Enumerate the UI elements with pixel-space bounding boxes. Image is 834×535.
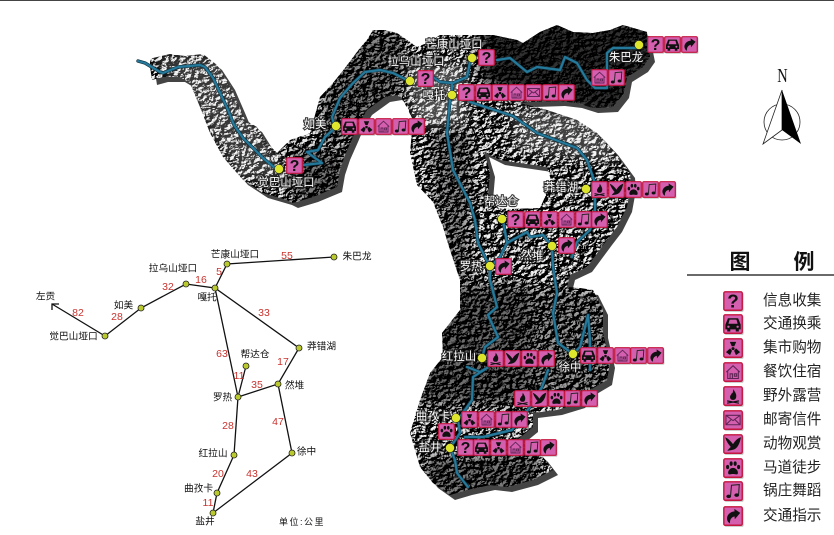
icon: wildlife [609, 182, 625, 199]
icon: transport [474, 440, 490, 457]
icon: info: ? [290, 158, 299, 175]
route distances: 35 [251, 379, 263, 391]
legend item: 信息收集 [724, 292, 822, 313]
legend item: 动物观赏 [724, 435, 821, 455]
icon: dance [525, 440, 541, 457]
icon: mail [526, 85, 542, 102]
icon: info: ? [462, 85, 471, 102]
route place names: 红拉山 [198, 446, 228, 460]
location: 朱巴龙: 朱巴龙 [609, 51, 643, 64]
icon: north arrow: N [777, 64, 788, 87]
icon: direction [496, 259, 512, 276]
legend item: 交通指示 [724, 506, 821, 527]
location: 曲孜卡 [416, 409, 528, 441]
location: 拉乌山垭口: 拉乌山垭口 [388, 54, 444, 68]
legend item: 邮寄信件 [724, 410, 821, 431]
icon: direction [409, 119, 425, 136]
legend item: 野外露营 [724, 387, 821, 407]
service row between 徐中 and 曲孜卡 [515, 391, 598, 408]
icon: direction [682, 37, 698, 54]
route place names: 帮达仓 [240, 348, 270, 360]
legend item: 锅庄舞蹈: 锅庄舞蹈 [763, 481, 821, 499]
icon: direction [559, 238, 575, 255]
route distances: 63 [216, 348, 228, 360]
terrain tonal shading [150, 20, 660, 500]
route place names: 拉乌山垭口 [149, 262, 197, 274]
icon: shopping [491, 440, 507, 457]
icon: shopping [359, 119, 375, 136]
icon: dance [543, 85, 559, 102]
icon: shopping [492, 85, 509, 102]
legend item: 动物观赏: 动物观赏 [763, 435, 821, 452]
legend item: 马道徒步 [724, 459, 821, 479]
river and road network [138, 48, 637, 487]
route place names: 如美 [114, 298, 133, 312]
route place names: 嘎托 [197, 290, 217, 304]
route place names: 曲孜卡 [184, 482, 213, 494]
location: 嘎托 [423, 85, 575, 102]
route distances: 55 [281, 250, 293, 262]
icon: horse trail [626, 182, 642, 199]
icon: direction [559, 85, 575, 102]
icon: transport [581, 348, 597, 365]
icon: shopping [598, 348, 614, 365]
location: 盐井: 盐井 [419, 440, 441, 454]
route distances: 43 [246, 468, 258, 480]
legend item: 交通换乘 [724, 314, 822, 335]
legend item: 集市购物 [724, 339, 821, 359]
route place names: 单位:公里 [279, 516, 325, 527]
location: 罗热 [460, 259, 512, 276]
location: 朱巴龙 [592, 37, 698, 87]
icon: info: ? [511, 212, 520, 229]
legend item: 邮寄信件: 邮寄信件 [763, 410, 821, 428]
legend item: 交通指示: 交通指示 [763, 506, 821, 524]
icon: direction [512, 412, 528, 429]
icon: lodging [559, 212, 575, 229]
icon: shopping [462, 412, 478, 429]
route place names: 芒康山垭口 [211, 248, 259, 260]
icon: dance [631, 348, 647, 365]
icon: wildlife [532, 391, 548, 408]
icon: direction [648, 348, 664, 365]
route distances [72, 250, 293, 509]
icon: info: ? [461, 440, 470, 457]
route distances: 16 [195, 274, 207, 286]
route place names: 左贡 [36, 290, 55, 302]
icon: dance [393, 119, 409, 136]
icon: dance [565, 391, 581, 408]
icon: dance [643, 182, 659, 199]
icon: direction [660, 182, 676, 199]
location: 徐中: 徐中 [559, 360, 581, 374]
route place names [36, 248, 372, 528]
icon: shopping [542, 212, 558, 229]
icon: lodging [615, 348, 631, 365]
icon: camping [515, 391, 531, 408]
location: 徐中 [559, 348, 664, 374]
icon: wildlife [505, 351, 521, 368]
route nodes [102, 254, 337, 516]
icon: transport [342, 119, 358, 136]
location: 如美: 如美 [304, 117, 326, 131]
icon: transport [525, 212, 541, 229]
route distances: 33 [258, 307, 270, 319]
icon: lodging [508, 440, 524, 457]
route place names: 盐井 [195, 514, 215, 528]
legend item: 信息收集: 信息收集 [763, 292, 822, 309]
location: 盐井 [419, 440, 557, 457]
route place names: 罗热 [213, 390, 232, 404]
terrain relief map [150, 20, 660, 500]
icon: dance [576, 212, 592, 229]
legend title: 图 [730, 251, 750, 274]
icon: dance [496, 412, 512, 429]
location: 如美 [304, 117, 425, 136]
icon: north arrow [763, 64, 801, 144]
legend item: 马道徒步: 马道徒步 [763, 459, 821, 476]
terrain hillshade surface [150, 25, 650, 495]
terrain drop shadow [155, 30, 655, 500]
icon: lodging [592, 70, 608, 87]
icon: direction [541, 440, 557, 457]
icon: transport [665, 37, 681, 54]
location: 红拉山 [442, 349, 555, 368]
route distances: 82 [72, 307, 84, 319]
location: 红拉山: 红拉山 [442, 349, 476, 363]
route place names: 莽错湖 [307, 340, 336, 352]
route distances: 47 [272, 416, 284, 428]
legend item: 野外露营: 野外露营 [763, 387, 821, 404]
icon: horse trail [439, 424, 455, 441]
route distances: 11 [203, 497, 214, 509]
location: 觉巴山垭口: 觉巴山垭口 [258, 176, 314, 189]
icon: direction [539, 351, 555, 368]
icon: info: ? [482, 50, 491, 67]
location: 觉巴山垭口 [258, 158, 314, 189]
location: 然堆 [521, 238, 575, 262]
legend item: 集市购物: 集市购物 [763, 339, 821, 356]
icon: lodging [479, 412, 495, 429]
icon: horse trail [522, 351, 538, 368]
location: 然堆: 然堆 [521, 248, 543, 262]
legend item: 交通换乘: 交通换乘 [763, 314, 822, 332]
location: 罗热: 罗热 [460, 260, 483, 273]
icon: horse trail [549, 391, 565, 408]
location: 莽错湖 [544, 180, 676, 199]
legend item: 餐饮住宿: 餐饮住宿 [763, 363, 821, 380]
legend item: 锅庄舞蹈 [724, 481, 821, 502]
location: 芒康山垭口: 芒康山垭口 [426, 37, 482, 51]
route place names: 徐中 [297, 444, 316, 458]
icon: dance [609, 70, 625, 87]
route place names: 朱巴龙 [342, 250, 372, 262]
legend item: 餐饮住宿 [724, 363, 821, 383]
icon: transport [476, 85, 492, 102]
location: 曲孜卡: 曲孜卡 [416, 409, 450, 423]
route lines [52, 257, 334, 513]
location: 芒康山垭口 [426, 37, 495, 67]
schematic route diagram [36, 248, 372, 528]
route place names: 然堆 [285, 378, 304, 392]
location: 帮达仓: 帮达仓 [484, 194, 519, 208]
icon: info: ? [421, 71, 430, 88]
location: 拉乌山垭口 [388, 54, 444, 88]
location: 嘎托: 嘎托 [423, 88, 445, 102]
route place names: 觉巴山垭口 [49, 330, 98, 342]
legend title: 例 [794, 251, 814, 274]
location: 帮达仓 [484, 194, 608, 229]
icon: lodging [509, 85, 525, 102]
route distances: 32 [162, 281, 174, 293]
icon: camping [592, 182, 608, 199]
legend item: 信息收集: ? [727, 292, 739, 313]
icon: direction [592, 212, 608, 229]
route distances: 17 [277, 356, 289, 368]
location: 莽错湖: 莽错湖 [544, 180, 578, 194]
icon: direction [582, 391, 598, 408]
route distances: 28 [111, 311, 123, 323]
route distances: 20 [212, 468, 224, 480]
route distances: 11 [234, 370, 245, 382]
icon: info [459, 85, 475, 102]
icon: info: ? [651, 37, 660, 54]
icon: lodging [376, 119, 392, 136]
route distances: 28 [222, 420, 234, 432]
route distances: 5 [216, 266, 222, 278]
icon: camping [488, 351, 504, 368]
legend [687, 251, 834, 527]
